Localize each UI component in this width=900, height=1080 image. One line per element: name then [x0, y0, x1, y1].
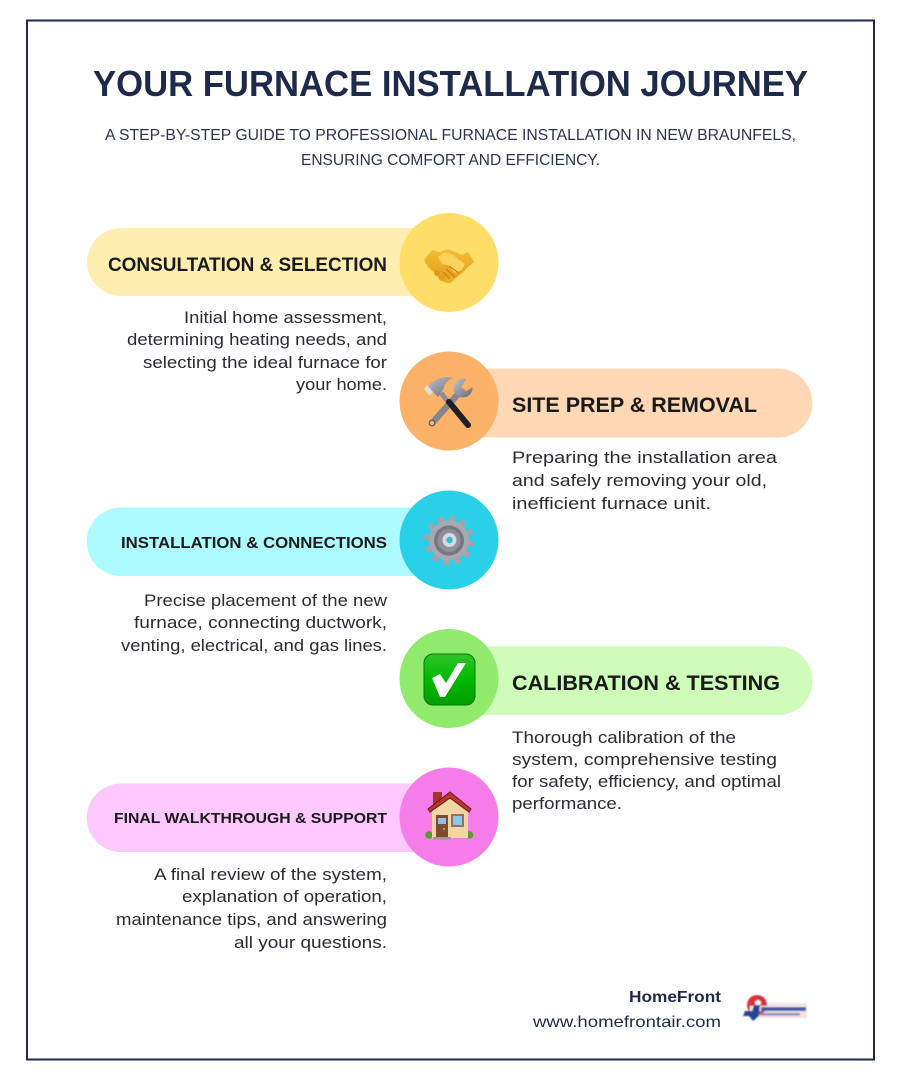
step 1 icon circle	[400, 213, 498, 312]
step 4 heading pill	[449, 646, 812, 715]
hammer handle	[441, 393, 449, 403]
step 4 description: for safety, efficiency, and optimal	[512, 772, 781, 791]
icon: gear	[428, 519, 470, 562]
logo	[743, 995, 807, 1021]
step 4: calibration and testing	[400, 629, 812, 813]
step 2 description: inefficient furnace unit.	[512, 494, 711, 513]
step 5 description: A final review of the system,	[154, 865, 387, 884]
step 2 description: and safely removing your old,	[512, 471, 767, 490]
title: YOUR FURNACE INSTALLATION JOURNEY	[93, 63, 808, 104]
step 3 heading: INSTALLATION & CONNECTIONS	[121, 535, 387, 552]
step 3 description: venting, electrical, and gas lines.	[121, 636, 387, 655]
subtitle	[105, 127, 796, 169]
step 3 icon circle	[400, 490, 498, 590]
subtitle: ENSURING COMFORT AND EFFICIENCY.	[301, 152, 600, 169]
step 4 heading: CALIBRATION & TESTING	[512, 672, 780, 695]
step 3 heading pill	[87, 508, 450, 576]
step 1 description	[127, 308, 387, 394]
hammer head	[426, 377, 453, 397]
step 5 heading pill	[87, 784, 450, 852]
step 1 heading: CONSULTATION & SELECTION	[108, 255, 387, 276]
step 2 heading pill	[449, 368, 812, 438]
step 1 description: selecting the ideal furnace for	[143, 353, 387, 372]
icon: hammer and wrench	[424, 374, 478, 426]
step 5 heading: FINAL WALKTHROUGH & SUPPORT	[114, 810, 387, 827]
icon: check mark	[424, 654, 475, 705]
step 2 icon circle	[400, 352, 498, 450]
step 3 description: Precise placement of the new	[144, 591, 388, 610]
wrench shaft and ring	[433, 393, 459, 422]
step 2 description	[512, 448, 778, 513]
step 5 description	[116, 865, 387, 952]
step 5 description: all your questions.	[234, 933, 387, 952]
step 5 description: maintenance tips, and answering	[116, 910, 387, 929]
step 1 description: your home.	[296, 375, 387, 394]
subtitle: A STEP-BY-STEP GUIDE TO PROFESSIONAL FURNACE INSTALLATION IN NEW BRAUNFELS,	[105, 127, 796, 144]
step 2 description: Preparing the installation area	[512, 448, 778, 467]
step 1: consultation and selection	[87, 213, 499, 394]
step 3: installation and connections	[87, 490, 498, 655]
step 3 description	[121, 591, 388, 655]
step 3 description: furnace, connecting ductwork,	[134, 613, 387, 632]
footer brand name: HomeFront	[629, 989, 722, 1006]
step 5: final walkthrough and support	[87, 768, 498, 952]
step 4 description: performance.	[512, 794, 622, 813]
step 2 heading: SITE PREP & REMOVAL	[512, 394, 757, 417]
step 4 description: system, comprehensive testing	[512, 750, 777, 769]
step 4 icon circle	[400, 629, 498, 728]
icon: handshake	[424, 249, 474, 283]
icon: house	[425, 792, 473, 840]
step 1 heading pill	[87, 228, 450, 296]
footer website: www.homefrontair.com	[532, 1014, 721, 1031]
step 1 description: Initial home assessment,	[184, 308, 387, 327]
step 5 icon circle	[400, 768, 498, 866]
step 4 description: Thorough calibration of the	[512, 728, 736, 747]
wrench head with open jaw	[454, 378, 472, 398]
step 2: site prep and removal	[400, 352, 812, 513]
step 5 description: explanation of operation,	[182, 887, 387, 906]
step 4 description	[512, 728, 781, 813]
step 1 description: determining heating needs, and	[127, 330, 387, 349]
